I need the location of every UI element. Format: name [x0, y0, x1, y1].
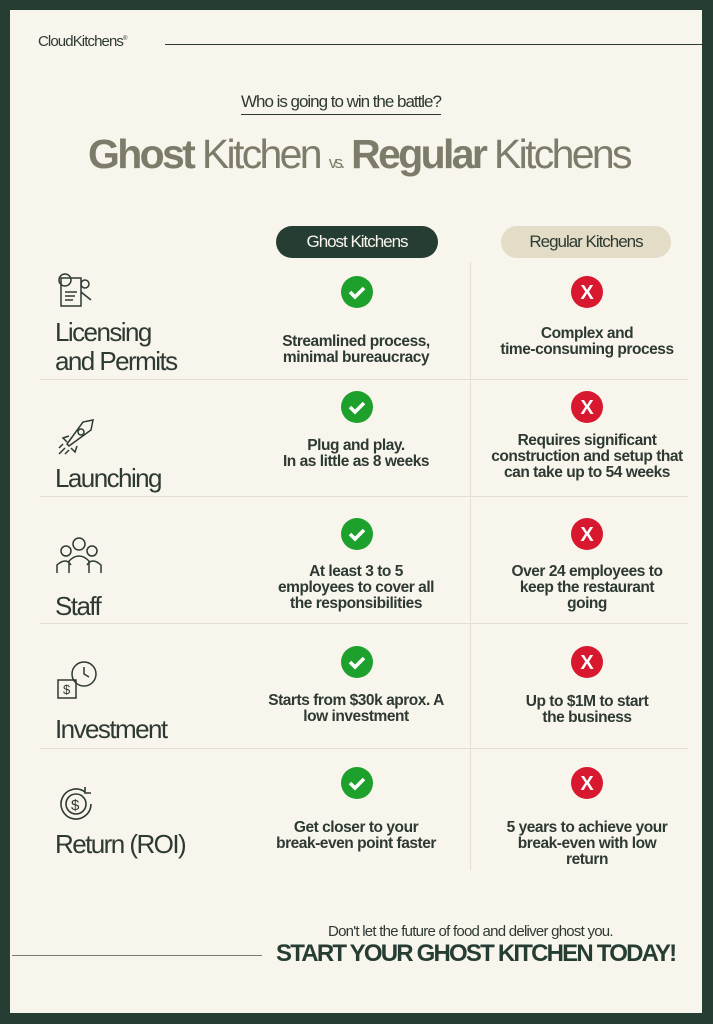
row: launching	[55, 419, 161, 493]
title: Ghost Kitchen vs. Regular Kitchens	[88, 131, 630, 177]
logo: CloudKitchens®	[38, 33, 127, 50]
text: can take up to 54 weeks	[504, 464, 670, 481]
text: Up to $1M to start	[526, 693, 648, 710]
text: break-even with low	[518, 835, 656, 852]
text: construction and setup that	[491, 448, 683, 465]
icon: dollar cycle: $	[71, 797, 80, 814]
text: break-even point faster	[276, 835, 436, 852]
text: employees to cover all	[278, 579, 434, 596]
text: keep the restaurant	[520, 579, 654, 596]
icon: document	[58, 273, 92, 307]
row: licensing	[55, 273, 178, 376]
row: return	[55, 787, 186, 859]
text: Requires significant	[518, 432, 656, 449]
call to action: START YOUR GHOST KITCHEN TODAY!	[276, 940, 675, 967]
icon: dollar cycle	[60, 787, 92, 820]
label: Launching	[55, 463, 161, 493]
divider vertical	[470, 262, 471, 870]
ghost texts: minimal bureaucracy	[283, 349, 429, 366]
text: the business	[542, 709, 632, 726]
icon: money clock	[57, 661, 97, 699]
text: Starts from $30k aprox. A	[268, 692, 444, 709]
label: and Permits	[55, 346, 177, 376]
column header: ghost: Ghost Kitchens	[306, 232, 408, 251]
icon: people	[56, 537, 102, 573]
regular texts: Complex and	[541, 325, 633, 342]
column header: ghost	[276, 226, 438, 258]
regular texts: time-consuming process	[500, 341, 674, 358]
text: Get closer to your	[294, 819, 418, 836]
ghost texts: Streamlined process,	[282, 333, 430, 350]
text: At least 3 to 5	[309, 563, 403, 580]
icon: money clock: $	[63, 682, 71, 697]
text: Over 24 employees to	[512, 563, 662, 580]
text: low investment	[303, 708, 409, 725]
text: 5 years to achieve your	[507, 819, 667, 836]
ghost texts	[282, 333, 430, 366]
label: Licensing	[55, 317, 151, 347]
column header: regular	[501, 226, 671, 258]
footer text: Don't let the future of food and deliver ghost you.	[328, 923, 613, 940]
label	[55, 317, 178, 376]
text: Plug and play.	[307, 437, 405, 454]
icon: rocket	[58, 419, 94, 454]
regular texts	[500, 325, 674, 358]
label: Investment	[55, 714, 167, 744]
text: In as little as 8 weeks	[283, 453, 429, 470]
subtitle: Who is going to win the battle?	[241, 92, 441, 111]
text: going	[567, 595, 607, 612]
text: the responsibilities	[290, 595, 422, 612]
label: Return (ROI)	[55, 829, 185, 859]
column header: regular: Regular Kitchens	[529, 232, 643, 251]
text: return	[566, 851, 608, 868]
row: staff	[55, 537, 102, 621]
label: Staff	[55, 591, 100, 621]
row: investment	[55, 661, 168, 744]
